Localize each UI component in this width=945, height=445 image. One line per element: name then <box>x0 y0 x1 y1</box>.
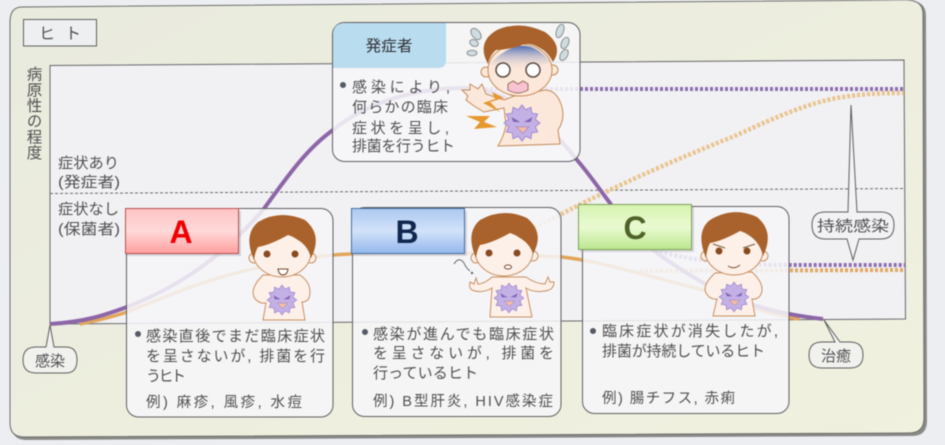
description text: 症状を呈し, <box>352 120 449 137</box>
description text: 何らかの臨床 <box>352 99 448 116</box>
label C: C <box>623 210 647 246</box>
disease examples: 例) 腸チフス, 赤痢 <box>602 390 735 407</box>
description text: うヒト <box>146 368 186 385</box>
icon: confident person <box>701 212 768 316</box>
card heading: 発症者 <box>366 37 412 55</box>
card background <box>352 208 561 416</box>
card background <box>332 22 580 162</box>
label C <box>578 204 694 252</box>
band label: asymptomatic: (保菌者) <box>58 221 120 238</box>
orange dotted persistent line low <box>640 270 905 271</box>
disease examples: 例) 麻疹, 風疹, 水痘 <box>146 394 302 411</box>
description text: 感染直後でまだ臨床症状 <box>146 328 325 345</box>
bullet <box>135 331 141 337</box>
purple solid curve <box>50 88 823 324</box>
icon: smiling person <box>249 215 316 320</box>
label B <box>352 208 467 256</box>
bullet <box>362 329 368 335</box>
callout: persistent infection <box>812 105 894 260</box>
bullet <box>590 328 596 334</box>
callout: infection <box>23 325 77 373</box>
chart: pathogenicity curves <box>50 60 906 324</box>
panel: A early carrier <box>126 208 333 417</box>
description text: 感染が進んでも臨床症状 <box>373 326 554 343</box>
chart plot area <box>50 60 906 324</box>
card header <box>333 23 446 68</box>
band label: symptomatic: (発症者) <box>58 174 120 191</box>
species label: ヒト: ヒト <box>39 26 81 43</box>
description text <box>146 328 325 385</box>
band label: asymptomatic: 症状なし <box>58 201 119 218</box>
band label: symptomatic <box>58 155 120 191</box>
card background <box>582 206 789 414</box>
description text <box>602 323 778 360</box>
callout: cure <box>809 320 863 368</box>
orange dotted persistent curve <box>480 93 904 253</box>
symptom threshold line <box>50 188 905 194</box>
panel: C recovered carrier <box>582 206 789 414</box>
purple dotted persistent line high <box>470 87 904 91</box>
description text: を呈さないが, 排菌を行 <box>146 348 325 365</box>
callout: infection: 感染 <box>35 353 65 370</box>
orange solid curve <box>80 253 800 324</box>
callout: cure: 治癒 <box>821 348 851 365</box>
icon: distressed person <box>462 23 571 146</box>
description text: 感染により, <box>352 79 450 96</box>
card background <box>126 208 333 417</box>
description text: 排菌を行うヒト <box>352 138 455 155</box>
description text: 臨床症状が消失したが, <box>602 323 778 340</box>
description text: 行っているヒト <box>373 365 478 382</box>
label B: B <box>395 214 419 250</box>
description text <box>352 79 455 155</box>
icon: puzzled person <box>454 213 554 317</box>
callout: persistent infection: 持続感染 <box>817 218 889 235</box>
description text <box>373 326 554 382</box>
label A <box>126 208 241 256</box>
disease examples: 例) B型肝炎, HIV感染症 <box>373 393 553 410</box>
description text: を呈さないが, 排菌を <box>373 345 554 362</box>
band label: symptomatic: 症状あり <box>58 155 119 172</box>
panel: B progressed carrier <box>352 208 561 416</box>
bullet <box>340 82 346 88</box>
description text: 排菌が持続しているヒト <box>602 343 765 360</box>
panel: symptomatic person <box>332 22 580 162</box>
band label: asymptomatic <box>58 201 120 238</box>
label A: A <box>169 214 193 250</box>
species label: ヒト <box>24 20 96 46</box>
purple dotted persistent line low <box>655 250 905 265</box>
y-axis title: 病原性の程度 <box>24 66 42 160</box>
